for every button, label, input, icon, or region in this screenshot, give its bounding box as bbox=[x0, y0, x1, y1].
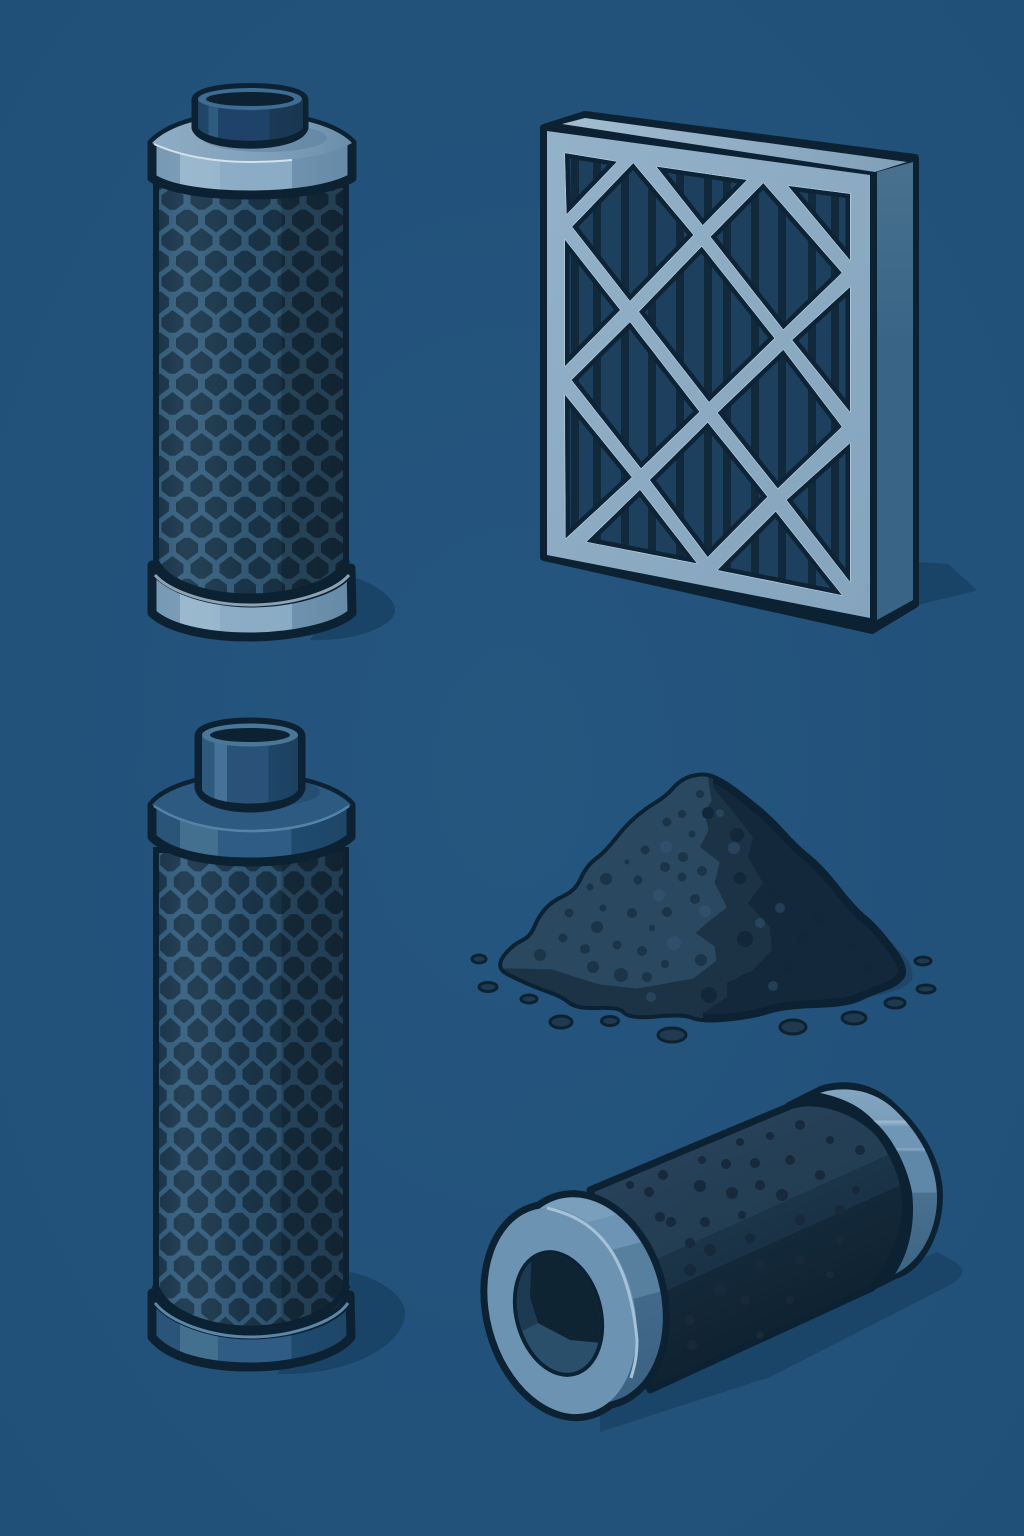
bore hole bbox=[512, 1250, 604, 1377]
top neck bbox=[198, 721, 302, 809]
scattered pebbles bbox=[472, 955, 935, 1042]
drop shadow bbox=[277, 1272, 405, 1374]
ground shadow bbox=[850, 942, 913, 1000]
top cap bbox=[152, 776, 351, 862]
top neck bbox=[195, 86, 305, 145]
mid shade bbox=[502, 776, 772, 1018]
mesh body bbox=[156, 185, 346, 597]
carbon body bbox=[590, 1103, 906, 1390]
cell inner shadow bbox=[565, 153, 850, 595]
cell edges bbox=[565, 153, 850, 595]
dark specks bbox=[701, 807, 872, 1003]
top cap bbox=[152, 115, 352, 195]
granule specks bbox=[534, 790, 707, 982]
horizontal carbon block cartridge bbox=[460, 1082, 962, 1436]
drop shadow bbox=[600, 1252, 962, 1432]
bottom cap bbox=[152, 560, 352, 637]
pleated media bbox=[565, 153, 850, 595]
top face bbox=[562, 118, 907, 172]
back rim bbox=[820, 1089, 937, 1274]
cartridge: light caps, top left bbox=[152, 86, 395, 640]
cartridge: dark caps, bottom left bbox=[152, 721, 405, 1374]
mesh body bbox=[156, 850, 346, 1330]
frame silhouette bbox=[544, 115, 915, 630]
front face ring bbox=[465, 1191, 659, 1431]
pores bbox=[626, 1120, 865, 1350]
rim silhouette bbox=[786, 1082, 943, 1293]
pile outline and base bbox=[502, 777, 902, 1018]
bottom cap bbox=[152, 1285, 351, 1367]
front band bbox=[460, 1175, 689, 1436]
side face bbox=[877, 162, 913, 620]
carbon granule pile bbox=[472, 760, 935, 1042]
lighter specks bbox=[646, 809, 785, 1002]
panel filter: pleated with lattice bbox=[544, 115, 975, 630]
drop shadow bbox=[310, 577, 395, 640]
illustration: carbon filter collection bbox=[148, 83, 976, 1432]
front frame bbox=[547, 131, 870, 618]
drop shadow bbox=[872, 563, 975, 630]
light face bbox=[502, 776, 726, 988]
